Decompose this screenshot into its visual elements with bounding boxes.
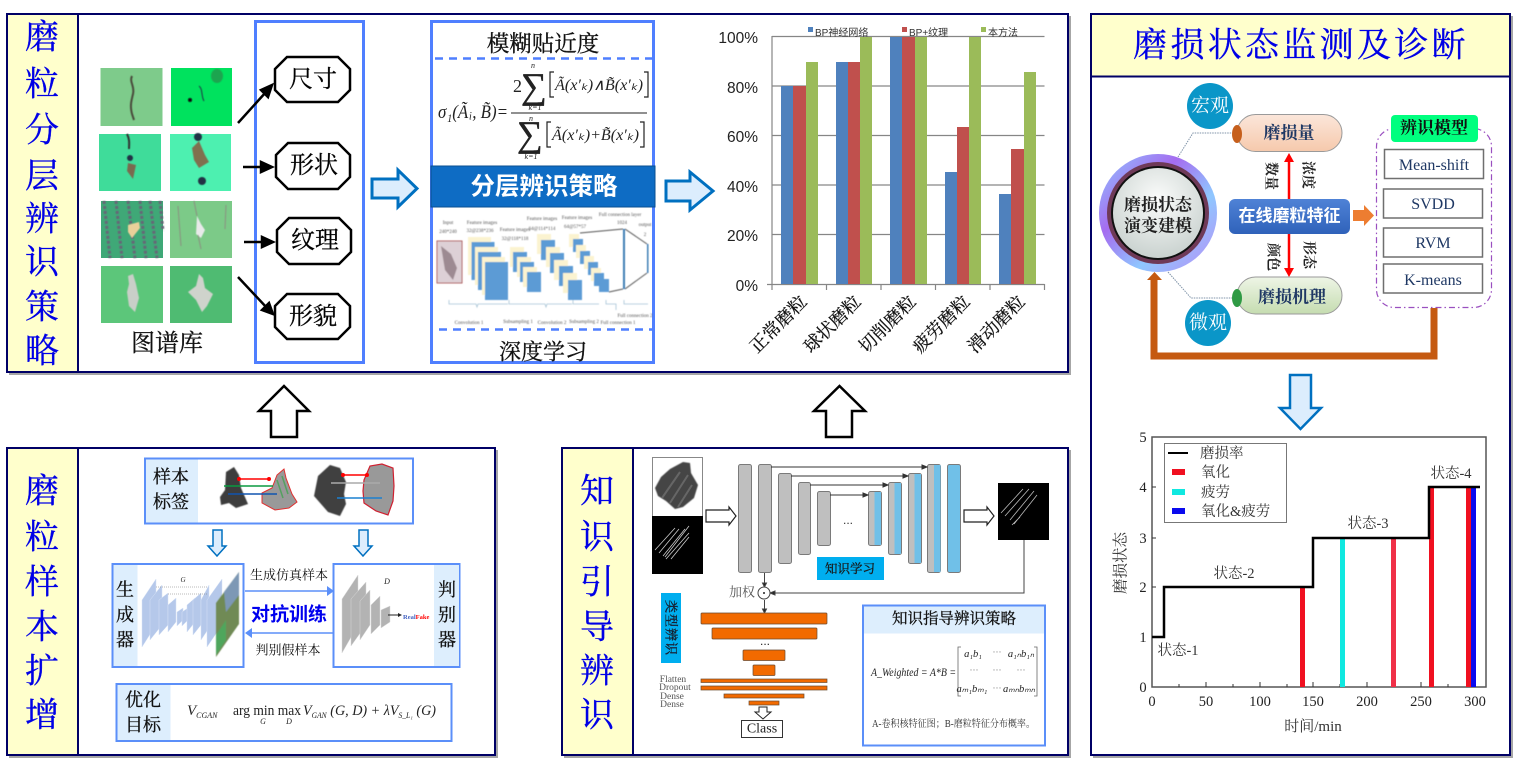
matrix formula: aₘₙbₘₙ	[1003, 684, 1036, 695]
model list	[1384, 150, 1484, 293]
side labels	[1262, 161, 1318, 271]
side labels: 颜色	[1264, 243, 1282, 271]
identification models group: SVDD	[1411, 196, 1455, 213]
heading: sample augmentation	[25, 472, 59, 734]
optimization target box: 目标	[125, 715, 162, 735]
tick labels: 3	[1139, 531, 1147, 547]
label: generated samples: 生成仿真样本	[250, 568, 328, 582]
diagram: convolutional network: Convolution 2	[538, 321, 567, 326]
optimization target box: arg min max	[233, 703, 301, 719]
discriminator box: 器	[438, 630, 456, 650]
pill: wear amount: 磨损量	[1264, 122, 1314, 142]
tick labels: 0	[1148, 694, 1156, 710]
chart legend: BP+纹理	[909, 26, 948, 39]
label: fuzzy closeness: 模糊贴近度	[487, 32, 599, 56]
output image	[998, 483, 1049, 540]
axis titles: 时间/min	[1284, 718, 1342, 735]
matrix formula: ···	[992, 683, 1002, 693]
heading: knowledge guided: 辨	[580, 652, 614, 690]
diagram: convolutional network: Convolution 1	[455, 321, 484, 326]
matrix formula: ···	[992, 665, 1002, 675]
chart legend: 本方法	[988, 26, 1018, 39]
optimization target box: 优化	[125, 690, 161, 710]
heading: hierarchical strategy: 磨	[25, 18, 59, 56]
formula: fuzzy closeness: Ã(x′ₖ)∧B̃(x′ₖ)	[554, 75, 643, 94]
label: type identification: 类型辨识	[664, 600, 678, 656]
heading: hierarchical strategy: 略	[25, 332, 59, 370]
layer names: Dropout	[659, 683, 691, 693]
tick labels: 4	[1139, 480, 1147, 496]
event bars	[1300, 487, 1476, 687]
formula: fuzzy closeness	[438, 61, 648, 161]
generator box: 器	[116, 630, 134, 650]
octagon: morphology: 形貌	[289, 303, 337, 330]
evolution model circle: 演变建模	[1124, 216, 1192, 236]
heading: hierarchical strategy: 辨	[25, 200, 59, 238]
chart category labels: 球状磨粒	[800, 292, 865, 357]
octagon: size	[275, 57, 350, 102]
heading: knowledge guided: 识	[580, 698, 615, 734]
arrow: models to timeline	[1280, 375, 1321, 429]
arrow: to discriminator	[354, 530, 372, 556]
diagram: convolutional network: Feature images	[500, 228, 530, 233]
side labels: 形态	[1300, 241, 1318, 270]
generator box: 成	[116, 605, 134, 625]
weighting node	[729, 584, 770, 600]
diagram: convolutional network: output	[639, 223, 652, 228]
diagram: convolutional network: Subsampling 1	[503, 320, 533, 325]
arrow: to shape	[243, 162, 272, 172]
generator box	[112, 564, 244, 667]
discriminator box: 判	[438, 580, 456, 600]
arrow: to generator	[208, 530, 226, 556]
heading: sample augmentation: 本	[25, 608, 59, 646]
layer names: Dense	[660, 700, 684, 710]
chart axis labels: 40%	[727, 179, 758, 196]
side labels: 数量	[1262, 162, 1280, 190]
chart legend: BP神经网络	[815, 26, 868, 39]
heading: hierarchical strategy: 粒	[25, 66, 59, 104]
optimization target box: S_L₁	[398, 711, 413, 720]
heading: knowledge guided: 识	[580, 520, 615, 556]
optimization target box: V	[187, 703, 196, 719]
octagon: morphology	[275, 294, 350, 339]
matrix formula: a₁ₙb₁ₙ	[1008, 649, 1035, 660]
generator box: G	[180, 576, 186, 584]
badge: macro	[1187, 83, 1233, 129]
tick labels: 300	[1464, 694, 1486, 710]
identification models group: K-means	[1404, 272, 1462, 289]
chart legend: 氧化&疲劳	[1201, 502, 1270, 520]
arrow: to size	[238, 85, 272, 123]
discriminator box: 别	[438, 605, 456, 625]
matrix formula	[870, 647, 1037, 696]
wear rate line	[1152, 487, 1480, 637]
heading: hierarchical strategy: 策	[25, 290, 59, 326]
optimization target box	[116, 684, 452, 741]
state labels: 状态-2	[1213, 565, 1255, 582]
diagram: convolutional network: Feature images	[467, 221, 497, 226]
sample label box: 标签	[153, 492, 189, 512]
chart category labels	[746, 292, 1029, 357]
label: adversarial training: 对抗训练	[251, 602, 327, 626]
discriminator box: RealFake	[403, 614, 429, 621]
discriminator box	[334, 564, 460, 667]
arrow: fake discrimination	[245, 628, 333, 638]
red arrow up	[1284, 153, 1294, 199]
evolution model circle: 磨损状态	[1124, 194, 1194, 214]
sample label box	[145, 458, 413, 524]
panel: particle hierarchical identification strategy	[7, 14, 1071, 375]
formula: fuzzy closeness: ∑	[517, 114, 543, 154]
octagon: texture	[277, 218, 351, 264]
micrograph library	[99, 68, 232, 323]
formula: fuzzy closeness: n	[531, 61, 535, 70]
chart category labels: 滑动磨粒	[964, 292, 1029, 357]
class box: Class	[747, 722, 777, 736]
heading: knowledge guided: 引	[580, 564, 614, 602]
formula: fuzzy closeness: σ₁(Ã ᵢ, B̃)=	[438, 102, 508, 123]
heading: sample augmentation: 增	[25, 698, 59, 734]
diagram: convolutional network: 64@114*114	[529, 227, 556, 232]
chart legend: 疲劳	[1201, 483, 1230, 501]
panel: knowledge-guided identification	[562, 448, 1071, 758]
banner: hierarchical strategy: 分层辨识策略	[470, 172, 618, 200]
arrow: network to output	[964, 507, 994, 525]
layer names	[659, 675, 691, 710]
heading: sample augmentation: 粒	[25, 518, 59, 556]
evolution model circle	[1099, 154, 1217, 272]
banner: hierarchical strategy	[431, 166, 655, 207]
pill: wear mechanism: 磨损机理	[1258, 286, 1326, 306]
U-net: ...	[843, 513, 853, 527]
diagram: convolutional network: Subsampling 2	[569, 320, 599, 325]
arrow: to class	[755, 707, 771, 719]
formula: fuzzy closeness: k=1	[529, 103, 541, 112]
strategy box	[431, 22, 655, 364]
tick labels: 150	[1302, 694, 1324, 710]
label: knowledge learning	[817, 557, 884, 580]
classifier layers	[701, 613, 827, 705]
octagon: shape	[276, 143, 350, 189]
matrix formula: ···	[1016, 665, 1026, 675]
arrow: sample augmentation up	[259, 386, 309, 437]
step chart: wear state over time	[1112, 430, 1486, 735]
formula: fuzzy closeness: 2	[513, 76, 522, 96]
diagram: convolutional network: 32@238*236	[466, 229, 494, 234]
pill: wear amount	[1232, 114, 1342, 152]
tick labels: 100	[1249, 694, 1271, 710]
arrow: input to network	[706, 507, 736, 525]
diagram: convolutional network: 64@57*57	[564, 225, 587, 230]
tick labels: 250	[1410, 694, 1432, 710]
optimization target box: GAN	[312, 711, 327, 720]
label: knowledge learning: 知识学习	[825, 562, 875, 576]
sample label box: 样本	[153, 467, 189, 487]
state labels: 状态-3	[1347, 515, 1389, 532]
label: deep learning: 深度学习	[499, 340, 587, 364]
formula: fuzzy closeness: Ã(x′ₖ)+B̃(x′ₖ)	[551, 125, 639, 144]
input images	[652, 458, 703, 574]
box: online particle features: 在线磨粒特征	[1238, 206, 1340, 226]
tick labels: 2	[1139, 580, 1147, 596]
y axis title: 磨损状态	[1112, 532, 1130, 594]
layer names: Dense	[660, 692, 684, 702]
dots between layers: ...	[760, 634, 770, 648]
matrix formula: ···	[992, 647, 1002, 657]
tick labels: 0	[1139, 680, 1147, 696]
badge: micro: 微观	[1189, 312, 1227, 334]
optimization target box: CGAN	[196, 711, 218, 720]
diagram: convolutional network: Full connection layer	[599, 213, 642, 218]
state labels	[1157, 465, 1472, 659]
state labels: 状态-1	[1157, 642, 1199, 659]
heading: sample augmentation: 扩	[25, 652, 59, 690]
tick labels: 200	[1356, 694, 1378, 710]
chart axis labels	[718, 30, 758, 295]
heading: hierarchical strategy: 层	[25, 158, 59, 196]
pill: wear mechanism	[1232, 277, 1342, 314]
label: type identification	[661, 593, 681, 663]
octagon: shape: 形状	[290, 152, 338, 179]
heading: knowledge guided	[580, 474, 615, 734]
panel: wear state monitoring and diagnosis	[1091, 14, 1513, 758]
knowledge guided strategy box: 知识指导辨识策略	[892, 610, 1016, 628]
arrow: knowledge guidance up	[814, 386, 865, 437]
chart axis labels: 20%	[727, 228, 758, 245]
bar chart: identification accuracy	[718, 26, 1044, 357]
heading: wear monitoring: 磨损状态监测及诊断	[1133, 26, 1469, 64]
chart legend: 氧化	[1201, 464, 1230, 481]
diagram: convolutional network: Feature images	[527, 217, 557, 222]
arrow: features to strategy	[372, 170, 417, 207]
diagram: convolutional network	[437, 213, 653, 326]
identification models group	[1376, 115, 1492, 308]
arrow: to morphology	[238, 277, 273, 314]
heading: sample augmentation: 磨	[25, 472, 59, 510]
chart axis labels: 60%	[727, 129, 758, 146]
heading: knowledge guided: 知	[580, 474, 614, 510]
diagram: convolutional network: Full connection 1	[600, 321, 636, 326]
strategy caption: A-卷积核特征图；B-磨粒特征分布概率。	[872, 717, 1035, 730]
red arrow down	[1284, 233, 1294, 277]
chart legend	[1164, 444, 1286, 522]
diagram: convolutional network: 240*240	[439, 230, 457, 235]
formula: fuzzy closeness: ∑	[521, 66, 547, 106]
matrix formula: A_Weighted = A*B =	[870, 665, 956, 679]
class box	[742, 720, 782, 738]
feature box	[256, 22, 364, 362]
heading: hierarchical strategy	[25, 18, 60, 370]
heading: hierarchical strategy: 识	[25, 244, 60, 282]
chart legend: 磨损率	[1200, 445, 1244, 462]
tick labels: 50	[1199, 694, 1213, 710]
heading: hierarchical strategy: 分	[25, 112, 59, 150]
optimization target box: D	[285, 717, 292, 726]
matrix formula: aₘ₁bₘ₁	[957, 684, 987, 695]
U-net	[738, 464, 960, 572]
tick labels	[1139, 430, 1486, 710]
feedback arrow	[1147, 272, 1434, 356]
arrow: generated samples	[245, 586, 334, 596]
state labels: 状态-4	[1430, 465, 1472, 482]
chart category labels: 疲劳磨粒	[909, 292, 974, 357]
panel: sample augmentation	[7, 448, 498, 758]
optimization target box: V	[303, 703, 312, 719]
chart axis labels: 80%	[727, 80, 758, 97]
formula: fuzzy closeness: k=1	[525, 152, 537, 161]
weighting node: 加权	[729, 584, 755, 600]
diagram: convolutional network: 2	[644, 233, 647, 238]
layer names: Flatten	[660, 675, 686, 685]
badge: micro	[1185, 300, 1231, 346]
octagon: texture: 纹理	[291, 227, 339, 254]
tag: identification models	[1391, 115, 1478, 142]
formula: fuzzy closeness: n	[529, 114, 533, 123]
label: fake samples: 判别假样本	[255, 642, 321, 658]
diagram: convolutional network: Feature images	[562, 216, 592, 221]
discriminator box: D	[383, 577, 390, 586]
diagram: convolutional network: Full connection 2	[618, 314, 653, 319]
generator box: 生	[116, 580, 134, 600]
diagram: convolutional network: 32@118*118	[502, 237, 529, 242]
side labels: 浓度	[1300, 161, 1316, 189]
connector: output to weighting	[762, 540, 1024, 613]
identification models group: RVM	[1415, 235, 1451, 252]
arrow: strategy to results	[666, 172, 713, 210]
label: atlas library: 图谱库	[131, 330, 203, 357]
matrix formula: ···	[970, 665, 978, 675]
chart category labels: 正常磨粒	[746, 292, 811, 357]
optimization target box: G	[260, 717, 266, 726]
chart legend	[808, 26, 1018, 39]
optimization target box: (G)	[413, 703, 436, 719]
tick labels: 1	[1139, 630, 1147, 646]
knowledge guided strategy box	[863, 606, 1045, 746]
arrow: to texture	[244, 237, 273, 247]
diagram: convolutional network: 1024	[617, 221, 628, 226]
octagon: size: 尺寸	[289, 66, 337, 93]
chart axis labels: 100%	[718, 30, 758, 47]
tick labels: 5	[1139, 430, 1147, 446]
diagram: convolutional network: Input	[443, 221, 454, 226]
badge: macro: 宏观	[1191, 94, 1229, 116]
chart axis labels: 0%	[736, 278, 758, 295]
arrow: to identification models	[1353, 205, 1374, 226]
optimization target box: (G, D) + λV	[327, 703, 400, 719]
heading: knowledge guided: 导	[580, 610, 614, 646]
box: online particle features	[1229, 199, 1350, 234]
tag: identification models: 辨识模型	[1400, 118, 1468, 138]
matrix formula: a₁b₁	[964, 649, 982, 660]
heading: sample augmentation: 样	[25, 564, 59, 602]
connector dotted lines	[1168, 133, 1232, 298]
chart category labels: 切削磨粒	[855, 292, 920, 357]
identification models group: Mean-shift	[1399, 157, 1470, 174]
